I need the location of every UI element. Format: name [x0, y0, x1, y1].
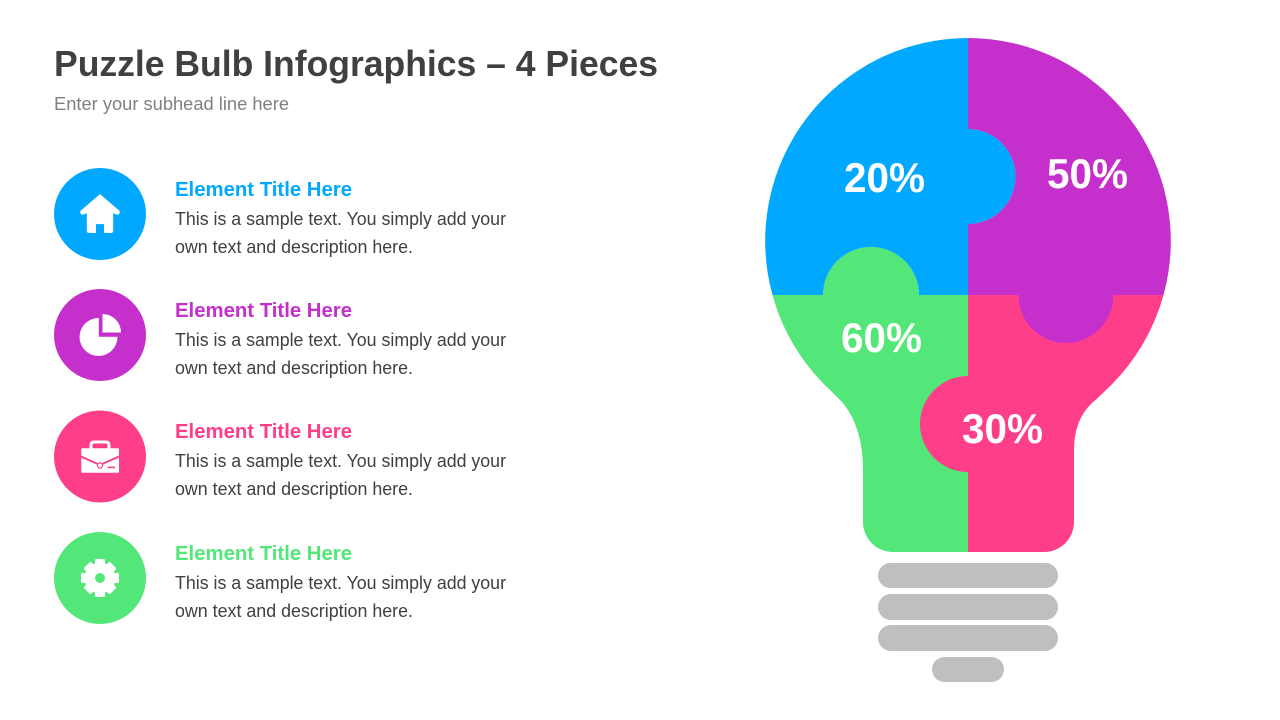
list item: chart element [54, 289, 506, 381]
element title: Element Title Here [175, 421, 352, 443]
icon: gear [54, 532, 146, 624]
description [175, 451, 506, 499]
subhead: Enter your subhead line here [54, 93, 289, 114]
description [175, 573, 506, 621]
description: own text and description here. [175, 358, 413, 378]
piece: blue 20% [765, 38, 1016, 295]
label: 50%: 50% [1047, 150, 1128, 197]
label: 30%: 30% [962, 405, 1043, 452]
list item: settings element [54, 532, 506, 624]
list item: home element [54, 168, 506, 260]
element title: Element Title Here [175, 179, 352, 201]
description [175, 330, 506, 378]
description: own text and description here. [175, 601, 413, 621]
description: own text and description here. [175, 237, 413, 257]
icon: home [54, 168, 146, 260]
icon: pie chart [54, 289, 146, 381]
description: This is a sample text. You simply add your [175, 209, 506, 229]
element title: Element Title Here [175, 543, 352, 565]
icon: briefcase [54, 410, 146, 502]
piece: pink 30% [920, 295, 1164, 552]
description: This is a sample text. You simply add your [175, 330, 506, 350]
puzzle bulb [765, 38, 1171, 682]
description: This is a sample text. You simply add your [175, 573, 506, 593]
description [175, 209, 506, 257]
piece: purple 50% [968, 38, 1171, 343]
description: This is a sample text. You simply add your [175, 451, 506, 471]
bulb base [878, 563, 1058, 682]
label: 60%: 60% [841, 314, 922, 361]
description: own text and description here. [175, 479, 413, 499]
element title: Element Title Here [175, 300, 352, 322]
list item: briefcase element [54, 410, 506, 502]
title: Puzzle Bulb Infographics – 4 Pieces [54, 43, 658, 84]
label: 20%: 20% [844, 154, 925, 201]
piece: green 60% [772, 247, 968, 552]
